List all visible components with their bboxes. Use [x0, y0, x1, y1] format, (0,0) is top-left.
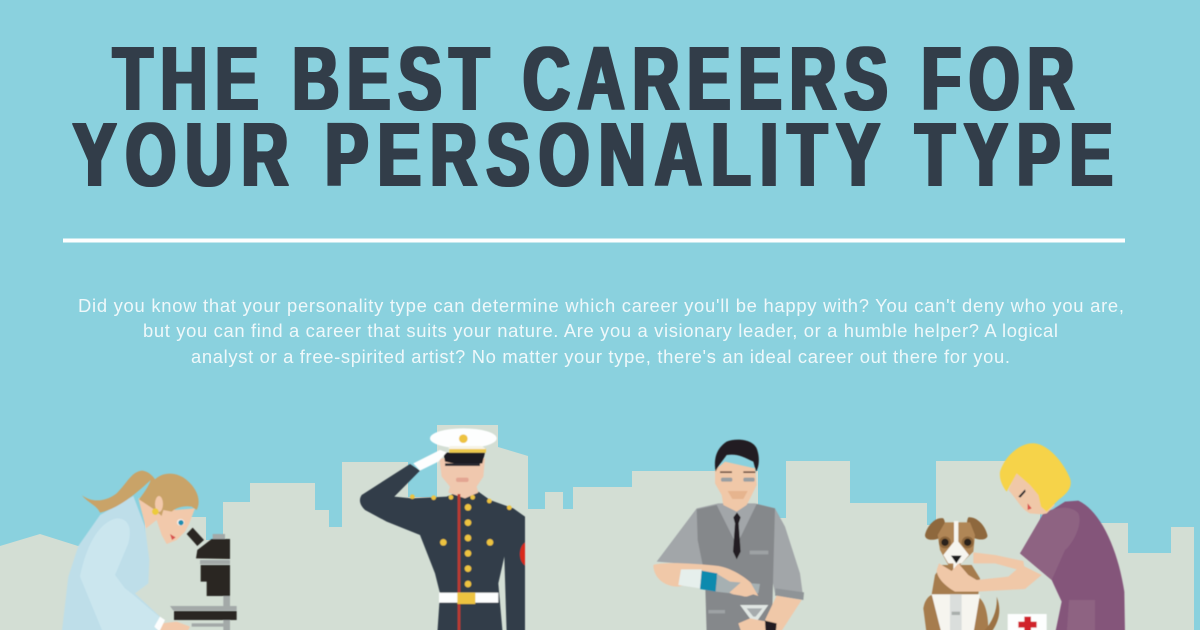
eyebrows	[720, 471, 755, 473]
intro paragraph: but you can find a career that suits your nature. Are you a visionary leader, or a humble helper? A logical	[143, 320, 1058, 341]
lab coat	[62, 496, 160, 630]
first aid kit	[1008, 614, 1047, 630]
sleeve	[1020, 508, 1080, 580]
hair	[715, 440, 759, 472]
intro paragraph: Did you know that your personality type can determine which career you'll be happy with? You can't deny who you are,	[78, 295, 1124, 316]
intro paragraph: analyst or a free-spirited artist? No matter your type, there's an ideal career out there for you.	[191, 346, 1010, 367]
vest pockets	[708, 551, 768, 613]
hand on bottle	[729, 582, 758, 597]
watch	[765, 621, 777, 630]
microscope	[170, 528, 237, 630]
nurse front arm and hand	[937, 563, 1042, 592]
intro paragraph	[78, 295, 1124, 367]
beard	[728, 491, 748, 499]
hand and cuff	[154, 617, 190, 630]
glasses	[721, 478, 755, 482]
eye	[177, 519, 184, 526]
dog	[923, 517, 999, 630]
title: YOUR PERSONALITY TYPE	[73, 104, 1113, 205]
bottle	[678, 569, 760, 593]
coat sleeve	[80, 518, 162, 630]
neck and face	[138, 495, 195, 544]
nurse face	[1008, 472, 1055, 514]
eyelash	[1018, 489, 1026, 498]
figure: bartender	[653, 440, 804, 630]
shirt	[657, 503, 803, 598]
sleeve cuff	[775, 588, 804, 600]
face and neck	[715, 462, 757, 512]
nurse hair	[1000, 443, 1071, 512]
cap	[430, 428, 497, 466]
armband	[520, 543, 525, 565]
uniform	[360, 464, 525, 630]
nurse back arm	[973, 552, 1025, 572]
earring	[152, 508, 159, 515]
pocket	[1067, 600, 1095, 630]
left arm	[653, 563, 758, 597]
right forearm	[765, 596, 802, 630]
lips	[170, 534, 176, 540]
belt	[439, 593, 498, 604]
face	[439, 458, 485, 498]
cocktail glass	[740, 605, 768, 622]
lips	[456, 478, 469, 482]
lips	[1028, 503, 1032, 510]
buttons	[410, 494, 512, 587]
red stripe	[458, 494, 460, 630]
dress	[1020, 501, 1125, 630]
tie	[733, 512, 741, 559]
ear	[155, 496, 163, 512]
hand holding glass	[738, 618, 767, 630]
figure: saluting marine	[360, 428, 525, 630]
hair with ponytail	[82, 471, 199, 516]
figure: nurse with dog	[923, 443, 1125, 630]
city skyline	[0, 425, 1194, 630]
white glove	[413, 450, 447, 471]
title: THE BEST CAREERS FOR	[113, 28, 1074, 129]
figure: scientist with microscope	[62, 471, 237, 630]
title	[73, 28, 1113, 205]
vest	[697, 504, 775, 630]
